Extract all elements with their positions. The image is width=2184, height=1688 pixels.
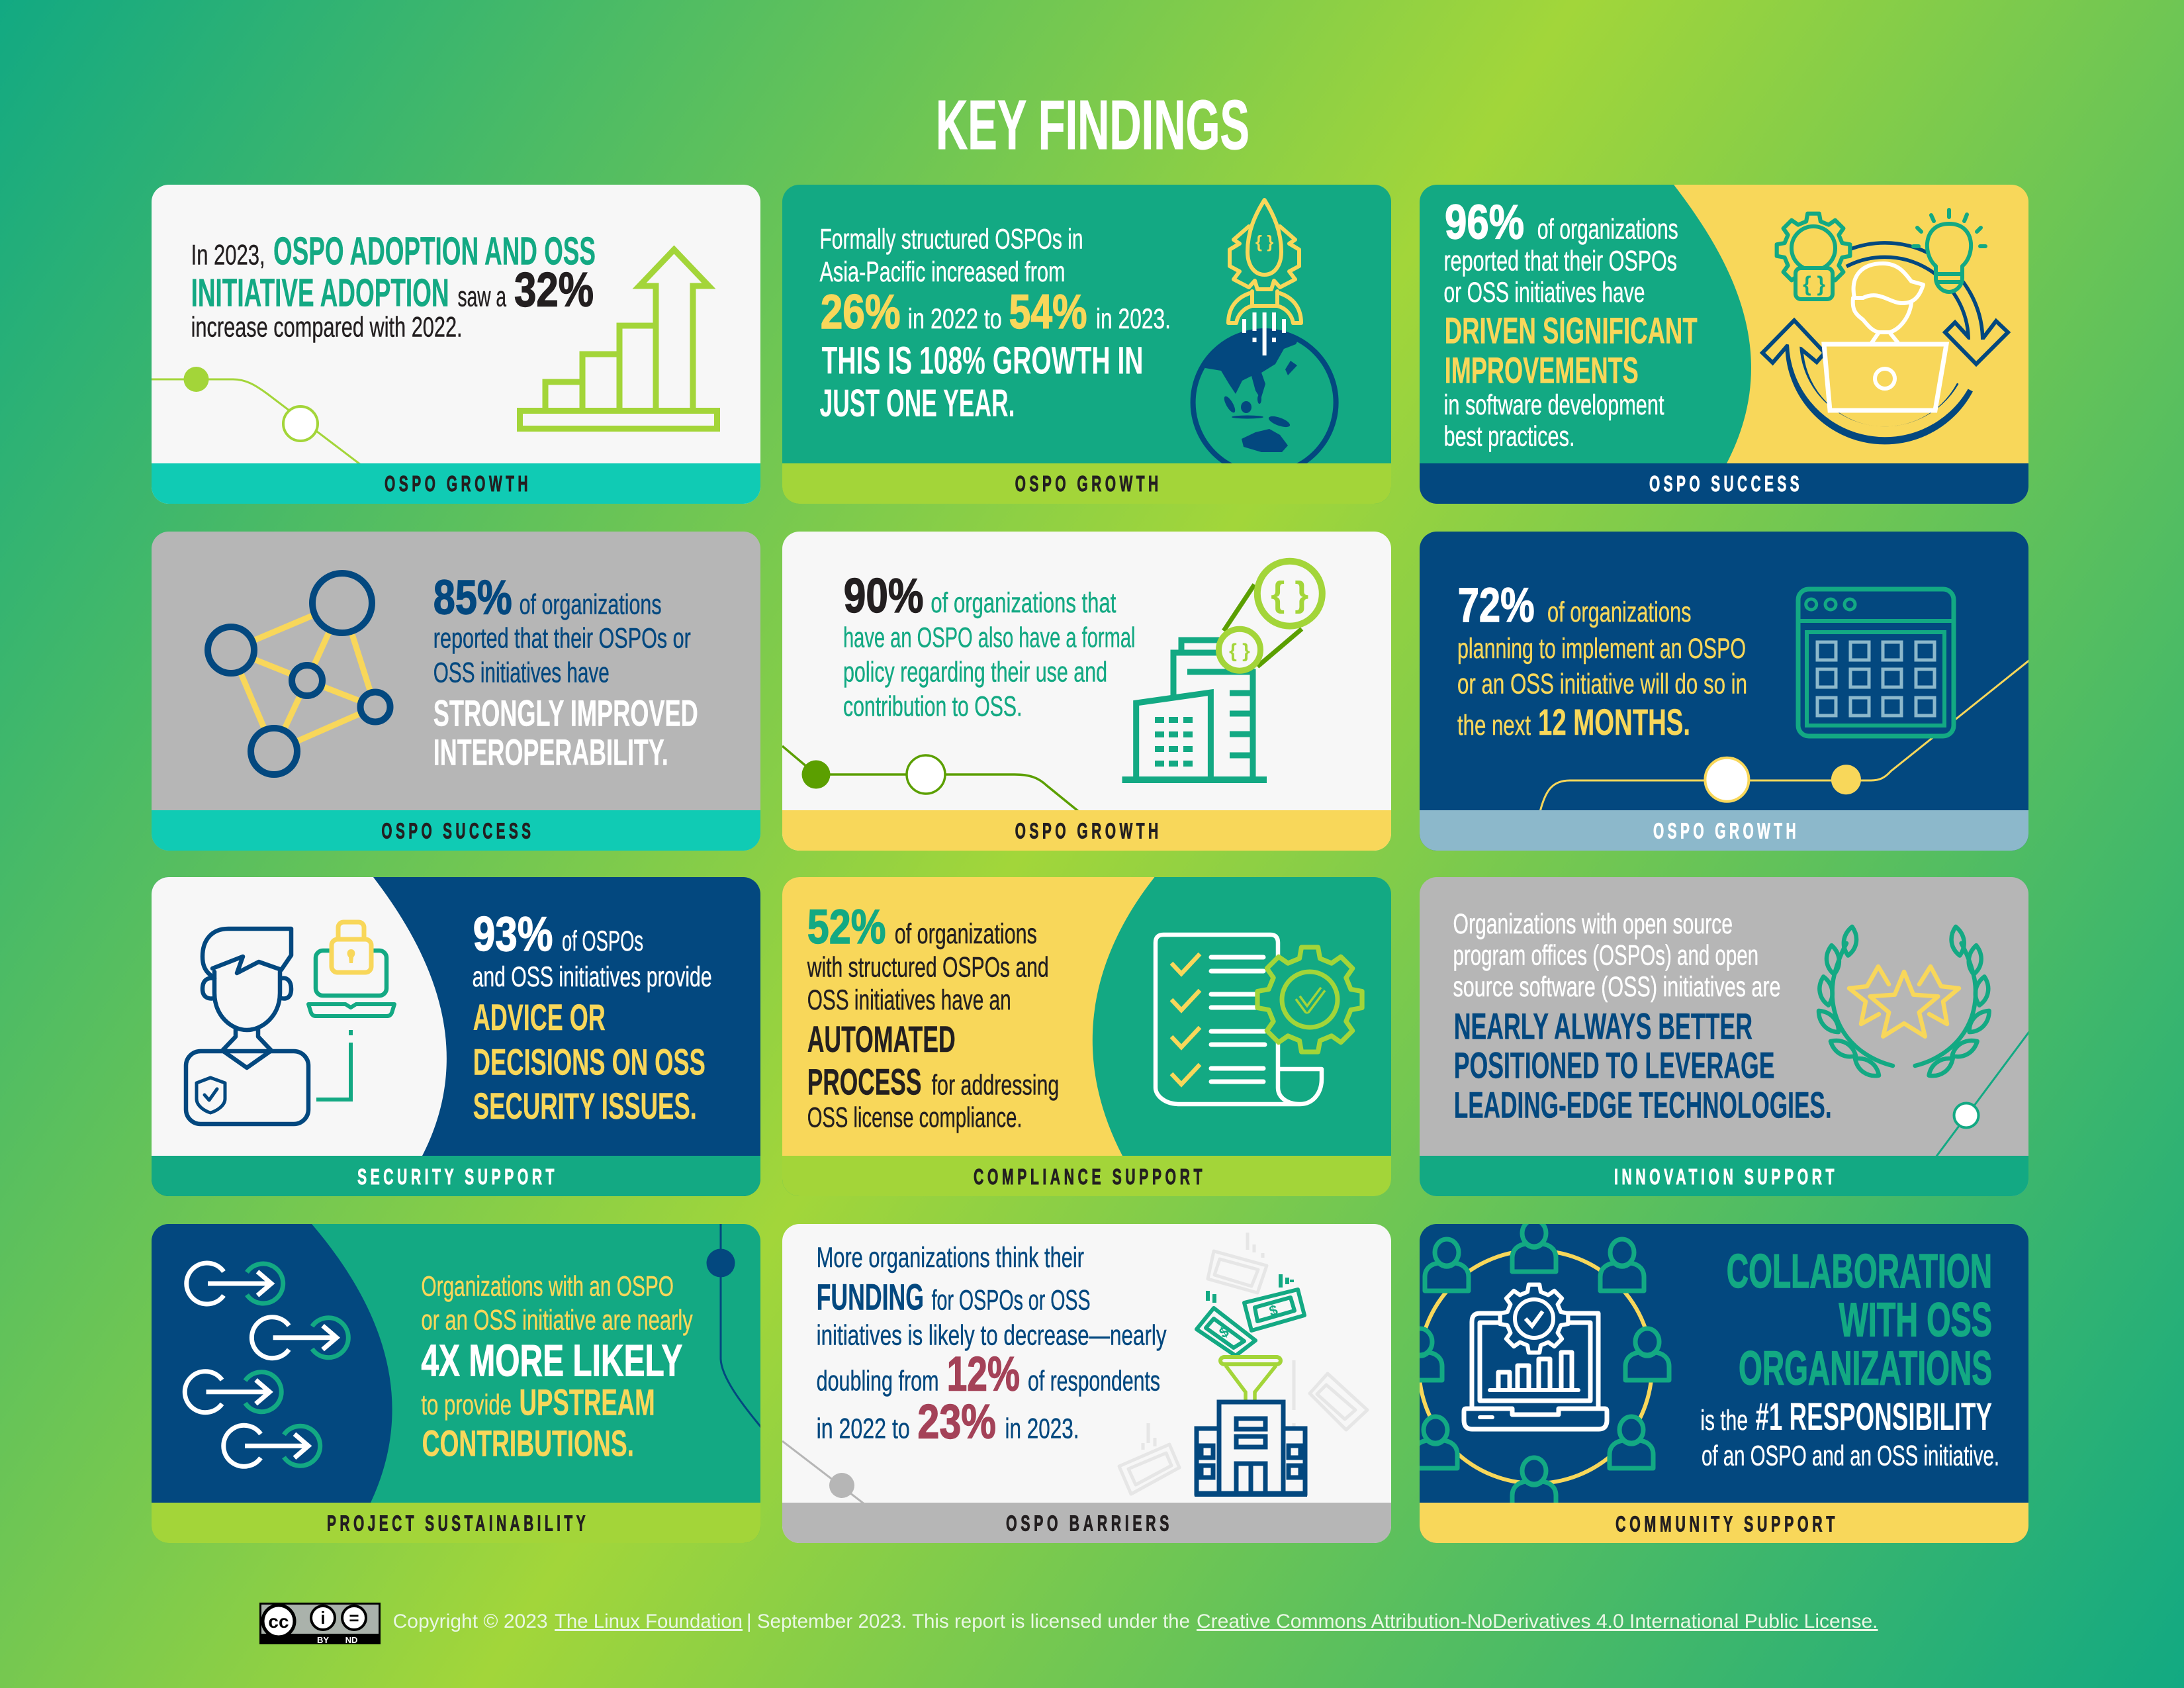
text block: best practices.	[1444, 420, 1575, 452]
card background	[152, 1224, 760, 1543]
text block	[843, 569, 1136, 723]
panel: security support	[152, 877, 760, 1196]
text block: IMPROVEMENTS	[1445, 349, 1639, 391]
label band	[152, 1156, 760, 1196]
label band	[1420, 1156, 2028, 1196]
card background	[152, 185, 760, 504]
text block: in 2023.	[1005, 1413, 1079, 1445]
label text: SECURITY SUPPORT	[357, 1164, 558, 1189]
text block: or an OSS initiative will do so in	[1457, 669, 1747, 700]
text block: INITIATIVE ADOPTION	[191, 271, 449, 315]
text block: OSPO ADOPTION AND OSS	[273, 229, 596, 273]
text block: NEARLY ALWAYS BETTER	[1454, 1005, 1752, 1047]
icon: security person	[186, 929, 308, 1124]
text block: for OSPOs or OSS	[932, 1284, 1091, 1316]
panel: community support	[1398, 1220, 2028, 1543]
text block: DECISIONS ON OSS	[473, 1041, 705, 1082]
icon: community circle of people	[1398, 1220, 1669, 1509]
panel: formal policy	[782, 532, 1391, 851]
text block: increase compared with 2022.	[191, 312, 463, 344]
label band	[152, 1503, 760, 1543]
text block: POSITIONED TO LEVERAGE	[1454, 1044, 1775, 1086]
text block	[819, 223, 1171, 425]
icon: network nodes	[208, 573, 390, 774]
card background	[782, 1224, 1391, 1543]
text block: doubling from	[817, 1366, 938, 1397]
panel: significant improvements	[1420, 185, 2028, 504]
connector line with node	[707, 1224, 761, 1427]
panel: OSPO barriers	[782, 1224, 1391, 1543]
footer: Creative Commons badge	[259, 1603, 381, 1645]
text block: in 2023.	[1096, 303, 1171, 335]
text block: Asia-Pacific increased from	[819, 256, 1066, 288]
text block	[433, 571, 698, 773]
connector line with nodes	[782, 746, 1079, 812]
card background	[782, 532, 1391, 851]
footer: copyright text: Copyright © 2023	[393, 1611, 548, 1632]
label band	[782, 463, 1391, 504]
text block: 85%	[433, 571, 512, 624]
text block	[421, 1271, 693, 1464]
text block: 90%	[844, 569, 924, 623]
icon: rising bars with arrow	[520, 250, 717, 429]
card background	[152, 877, 760, 1196]
footer: Creative Commons badge: =	[349, 1608, 359, 1628]
text block: 12 MONTHS.	[1538, 701, 1690, 743]
label band	[152, 463, 760, 504]
text block: OSS license compliance.	[807, 1102, 1022, 1134]
label band	[782, 810, 1391, 851]
label band	[1420, 1503, 2028, 1543]
curved panel shape	[1420, 185, 1751, 463]
text block	[1453, 908, 1832, 1125]
text block: 32%	[514, 263, 594, 317]
text block: WITH OSS	[1839, 1293, 1992, 1346]
card background	[782, 877, 1391, 1196]
text block: the next	[1457, 710, 1531, 741]
text block: INTEROPERABILITY.	[433, 731, 668, 773]
footer: Creative Commons badge: ND	[345, 1635, 357, 1645]
text block: 26%	[821, 285, 901, 339]
text block: to provide	[421, 1389, 512, 1421]
card background	[1420, 1224, 2028, 1543]
text block: of organizations	[1547, 596, 1692, 628]
label text: INNOVATION SUPPORT	[1614, 1164, 1838, 1189]
icon: upstream arrows	[185, 1263, 348, 1466]
text block	[1457, 579, 1747, 743]
footer: copyright text: Creative Commons Attribution-NoDerivatives 4.0 International Public License.	[1197, 1611, 1878, 1632]
text block: SECURITY ISSUES.	[473, 1085, 697, 1127]
footer: copyright text: | September 2023. This report is licensed under the	[747, 1611, 1190, 1632]
text block: STRONGLY IMPROVED	[433, 692, 698, 734]
text block: THIS IS 108% GROWTH IN	[822, 340, 1144, 383]
text block: of organizations	[895, 918, 1037, 950]
label band	[1420, 463, 2028, 504]
icon: office building with code: { }	[1271, 575, 1308, 614]
label text: PROJECT SUSTAINABILITY	[327, 1511, 589, 1535]
text block	[1700, 1245, 1999, 1472]
curved panel shape	[782, 877, 1154, 1156]
text block: of an OSPO and an OSS initiative.	[1702, 1440, 1999, 1472]
card background	[1420, 185, 2028, 504]
icon: office building with code	[1122, 561, 1322, 783]
icon: calendar window	[1798, 589, 1954, 736]
text block: or OSS initiatives have	[1444, 277, 1645, 308]
card background	[1420, 877, 2028, 1196]
curved panel shape	[152, 877, 447, 1156]
text block: FUNDING	[817, 1276, 924, 1317]
footer: copyright text	[393, 1611, 1878, 1632]
text block	[473, 908, 712, 1127]
card background	[1420, 532, 2028, 851]
text block: UPSTREAM	[520, 1382, 655, 1423]
text block	[1444, 196, 1698, 452]
connector line with nodes	[152, 367, 361, 465]
panel: compliance support	[782, 877, 1391, 1196]
text block: 54%	[1009, 285, 1087, 339]
icon: office building with code: { }	[1229, 640, 1250, 662]
text block: contribution to OSS.	[843, 691, 1022, 723]
panel: interoperability	[152, 532, 760, 851]
icon: developer cycle	[1762, 210, 2008, 436]
card background	[152, 532, 760, 851]
icon: checklist document	[1156, 935, 1362, 1104]
text block	[191, 229, 596, 344]
text block: ORGANIZATIONS	[1739, 1342, 1992, 1395]
text block: initiatives is likely to decrease—nearly	[817, 1320, 1167, 1352]
label band	[782, 1503, 1391, 1543]
text block: In 2023,	[191, 240, 265, 271]
text block: 12%	[947, 1348, 1020, 1401]
label band	[1420, 810, 2028, 851]
text block: OSS initiatives have an	[807, 984, 1011, 1016]
footer: Creative Commons badge: i	[320, 1608, 326, 1628]
panel: innovation support	[1420, 877, 2030, 1196]
icon: banknotes funnel and building: $	[1216, 1323, 1232, 1341]
infographic canvas	[152, 99, 2028, 1644]
icon: laptop with gear and chart	[1464, 1285, 1607, 1429]
footer: copyright text: The Linux Foundation	[555, 1611, 743, 1632]
text block: CONTRIBUTIONS.	[422, 1422, 634, 1464]
text block: of organizations that	[931, 587, 1116, 619]
text block: source software (OSS) initiatives are	[1453, 971, 1780, 1003]
text block: More organizations think their	[817, 1242, 1084, 1274]
text block: policy regarding their use and	[843, 656, 1107, 688]
panel: Asia-Pacific growth	[782, 185, 1391, 504]
title: KEY FINDINGS	[936, 86, 1250, 164]
text block: JUST ONE YEAR.	[819, 382, 1015, 425]
label band	[152, 810, 760, 851]
icon: rocket: { }	[1255, 232, 1273, 252]
text block: of organizations	[520, 588, 662, 620]
text block	[807, 900, 1059, 1134]
text block: LEADING-EDGE TECHNOLOGIES.	[1454, 1084, 1832, 1125]
icon: faint falling banknotes	[1119, 1233, 1367, 1494]
label text: COMMUNITY SUPPORT	[1615, 1511, 1839, 1536]
text block: #1 RESPONSIBILITY	[1755, 1395, 1992, 1438]
text block: planning to implement an OSPO	[1457, 633, 1746, 665]
icon: banknotes funnel and building	[1195, 1274, 1307, 1497]
text block: saw a	[458, 281, 506, 313]
text block: reported that their OSPOs or	[433, 622, 691, 654]
text block: or an OSS initiative are nearly	[421, 1304, 693, 1336]
text block: 93%	[473, 908, 553, 961]
icon: banknotes funnel and building: $	[1267, 1301, 1279, 1319]
text block: OSS initiatives have	[433, 657, 610, 689]
curved panel shape	[152, 1224, 392, 1503]
label band	[782, 1156, 1391, 1196]
card background	[782, 185, 1391, 504]
text block: ADVICE OR	[473, 996, 606, 1038]
panel: 12 months	[1420, 532, 2030, 851]
connector line with node	[1936, 1030, 2030, 1157]
text block: 4X MORE LIKELY	[421, 1335, 682, 1385]
text block	[817, 1242, 1167, 1449]
panel: OSPO adoption growth	[152, 185, 760, 504]
text block: COLLABORATION	[1727, 1245, 1992, 1298]
text block: in software development	[1444, 389, 1664, 421]
text block: of respondents	[1028, 1366, 1160, 1397]
text block: with structured OSPOs and	[807, 952, 1049, 984]
text block: reported that their OSPOs	[1444, 245, 1677, 277]
footer: Creative Commons badge: BY	[317, 1635, 329, 1645]
label text: COMPLIANCE SUPPORT	[974, 1164, 1206, 1189]
label text: OSPO GROWTH	[1015, 471, 1162, 496]
text block: 72%	[1458, 579, 1535, 632]
icon: laptop with lock	[308, 922, 394, 1100]
icon: globe	[1190, 328, 1339, 463]
icon: developer cycle: { }	[1803, 272, 1825, 296]
text block: have an OSPO also have a formal	[843, 622, 1136, 653]
text block: of OSPOs	[562, 925, 643, 957]
text block: Organizations with an OSPO	[421, 1271, 674, 1303]
icon: laurel wreath with stars	[1814, 926, 1993, 1080]
text block: in 2022 to	[908, 303, 1002, 335]
text block: 96%	[1445, 196, 1524, 250]
text block: PROCESS	[807, 1060, 921, 1102]
connector line with node	[782, 1441, 864, 1504]
label text: OSPO GROWTH	[385, 471, 531, 496]
text block: of organizations	[1537, 214, 1678, 246]
text block: is the	[1700, 1405, 1748, 1436]
text block: Formally structured OSPOs in	[819, 223, 1083, 255]
text block: 52%	[807, 900, 886, 954]
label text: OSPO SUCCESS	[381, 819, 534, 843]
panel: project sustainability	[152, 1224, 761, 1543]
footer: Creative Commons badge: cc	[268, 1611, 289, 1632]
text block: in 2022 to	[817, 1413, 910, 1445]
label text: OSPO GROWTH	[1653, 819, 1799, 843]
label text: OSPO SUCCESS	[1649, 471, 1803, 496]
text block: DRIVEN SIGNIFICANT	[1445, 309, 1698, 351]
icon: rocket	[1228, 200, 1301, 355]
text block: Organizations with open source	[1453, 908, 1733, 940]
label text: OSPO BARRIERS	[1006, 1511, 1173, 1535]
text block: and OSS initiatives provide	[473, 961, 712, 993]
text block: for addressing	[932, 1069, 1059, 1101]
label text: OSPO GROWTH	[1015, 819, 1162, 843]
text block: AUTOMATED	[807, 1018, 956, 1060]
text block: program offices (OSPOs) and open	[1453, 940, 1758, 972]
text block: 23%	[917, 1395, 996, 1449]
connector line with nodes	[1540, 659, 2030, 812]
